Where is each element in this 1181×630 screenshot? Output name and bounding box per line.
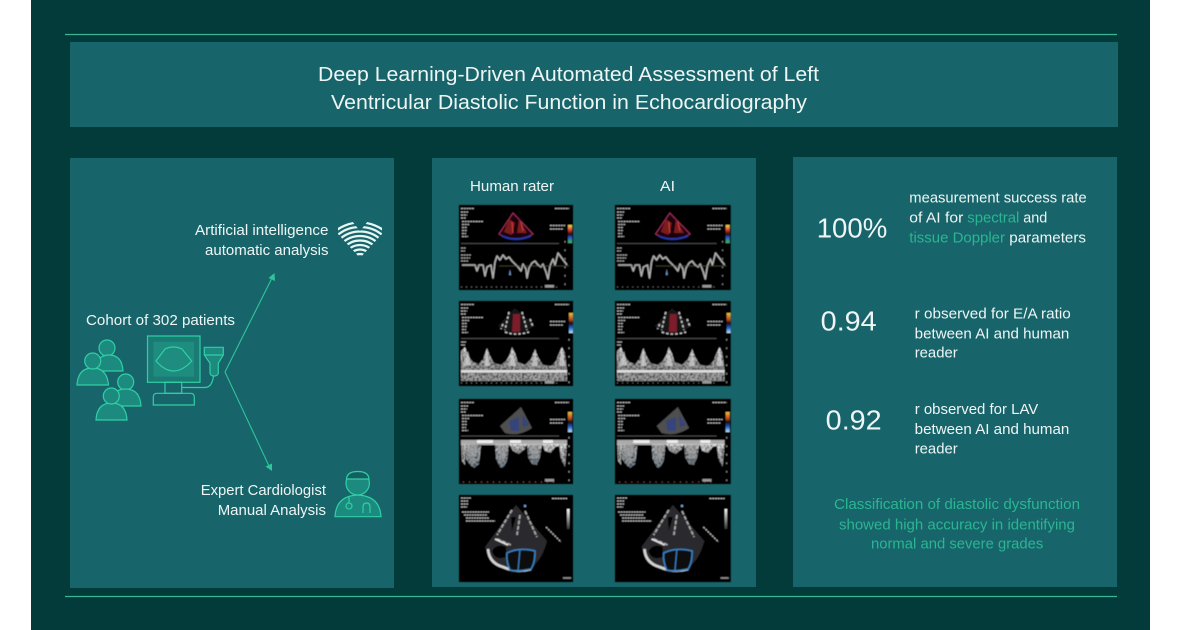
panel: study workflow [70,158,400,588]
stat: E/A ratio correlation: 0.94 [821,306,877,337]
image: human rater spectral Doppler [459,301,573,386]
stat: 100% success rate [817,190,1087,246]
image: human rater left atrial volume [459,495,573,582]
stat: E/A ratio correlation: r observed for E/A ratio [915,305,1071,322]
stat: E/A ratio correlation [821,305,1071,362]
stat: 100% success rate: and [1023,210,1047,227]
stat: LAV correlation: reader [915,440,958,457]
label: artificial intelligence: Artificial intelligence [195,222,328,239]
image: human rater tissue Doppler [459,205,573,290]
conclusion text [834,496,1080,552]
label: expert cardiologist: Manual Analysis [218,502,326,519]
stat: LAV correlation: between AI and human [915,421,1069,438]
stat: 100% success rate: measurement success rate [909,190,1087,207]
image: AI tissue Doppler [615,205,731,290]
arrow: to expert cardiologist [225,372,272,471]
panel: key results [793,157,1117,587]
heading: AI: AI [660,178,675,195]
conclusion text: Classification of diastolic dysfunction [834,496,1080,513]
heading: human rater: Human rater [470,178,554,195]
title: Ventricular Diastolic Function in Echocardiography [331,91,808,114]
stat: 100% success rate: spectral [967,210,1019,227]
conclusion text: showed high accuracy in identifying [839,516,1075,533]
stat: E/A ratio correlation: reader [915,345,958,362]
stat: 100% success rate: parameters [1009,229,1086,246]
label: expert cardiologist: Expert Cardiologist [201,482,327,499]
label: expert cardiologist [201,482,327,519]
stat: 100% success rate: of AI for [909,210,963,227]
image: AI spectral Doppler [615,301,731,386]
icon: doctor [335,472,381,517]
label: cohort: Cohort of 302 patients [86,312,235,329]
conclusion text: normal and severe grades [871,535,1043,552]
title: Deep Learning-Driven Automated Assessment of Left [318,63,819,86]
stat: LAV correlation: r observed for LAV [915,401,1038,418]
image: AI pulmonary Doppler [615,399,731,484]
stat: LAV correlation: 0.92 [826,404,882,435]
panel: echocardiography comparison [432,158,756,587]
image: AI left atrial volume [615,495,731,582]
panel: title [70,42,1118,127]
label: artificial intelligence: automatic analysis [205,242,328,259]
stat: E/A ratio correlation: between AI and human [915,325,1069,342]
stat: 100% success rate: 100% [817,213,887,244]
icon: wireless heart [338,222,382,256]
image: human rater pulmonary Doppler [459,399,573,484]
label: artificial intelligence [195,222,328,259]
icon: ultrasound machine [148,336,223,405]
icon: patients [77,340,141,420]
arrow: to AI analysis [225,273,275,372]
title [318,63,819,114]
stat: 100% success rate: tissue Doppler [909,229,1005,246]
stat: LAV correlation [826,401,1069,457]
